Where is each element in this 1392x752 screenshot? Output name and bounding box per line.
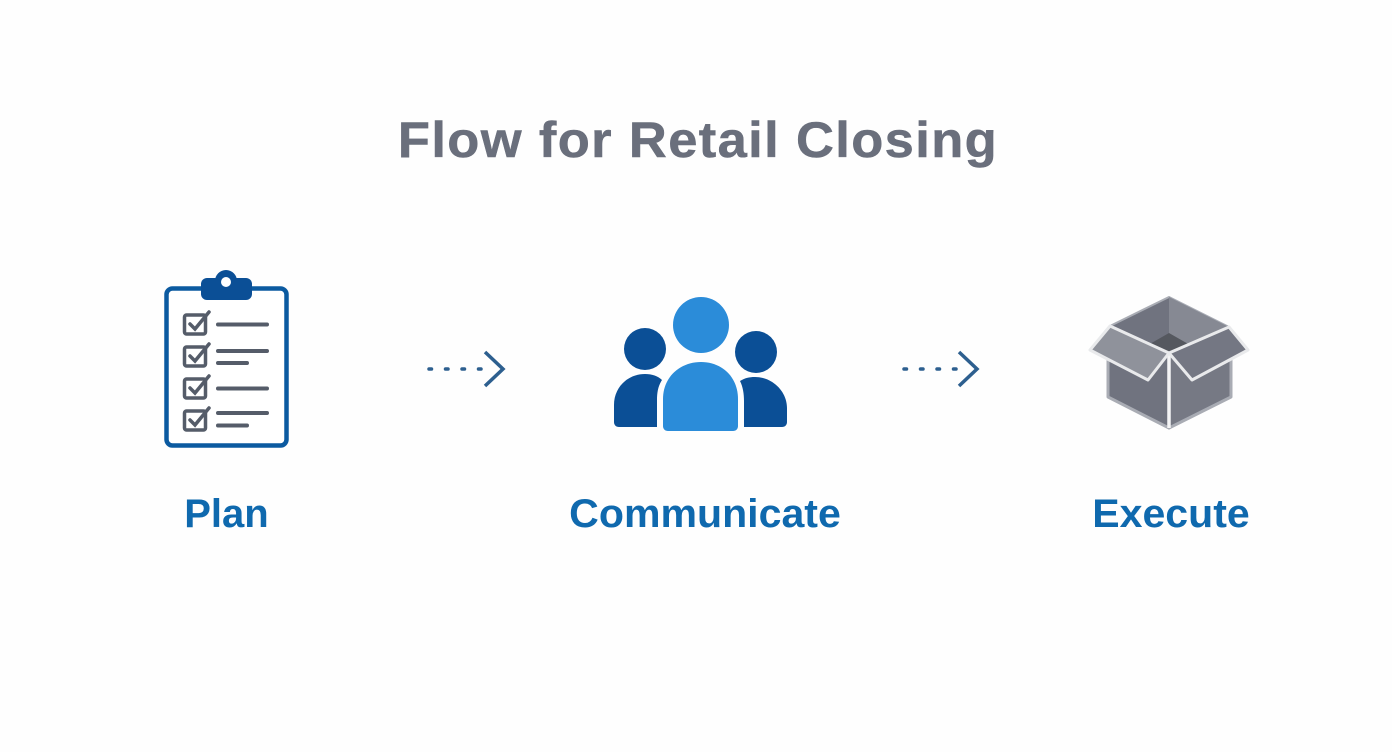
arrow: plan to communicate: [429, 352, 503, 386]
label: Communicate: Communicate: [569, 492, 840, 536]
label: Plan: Plan: [184, 492, 269, 536]
icon: people group: [614, 297, 787, 431]
icon: open box: [1090, 297, 1248, 428]
icon: clipboard checklist: [166, 270, 286, 446]
label: Execute: Execute: [1092, 492, 1249, 536]
title: Flow for Retail Closing: [397, 112, 998, 168]
arrow: communicate to execute: [904, 352, 977, 386]
